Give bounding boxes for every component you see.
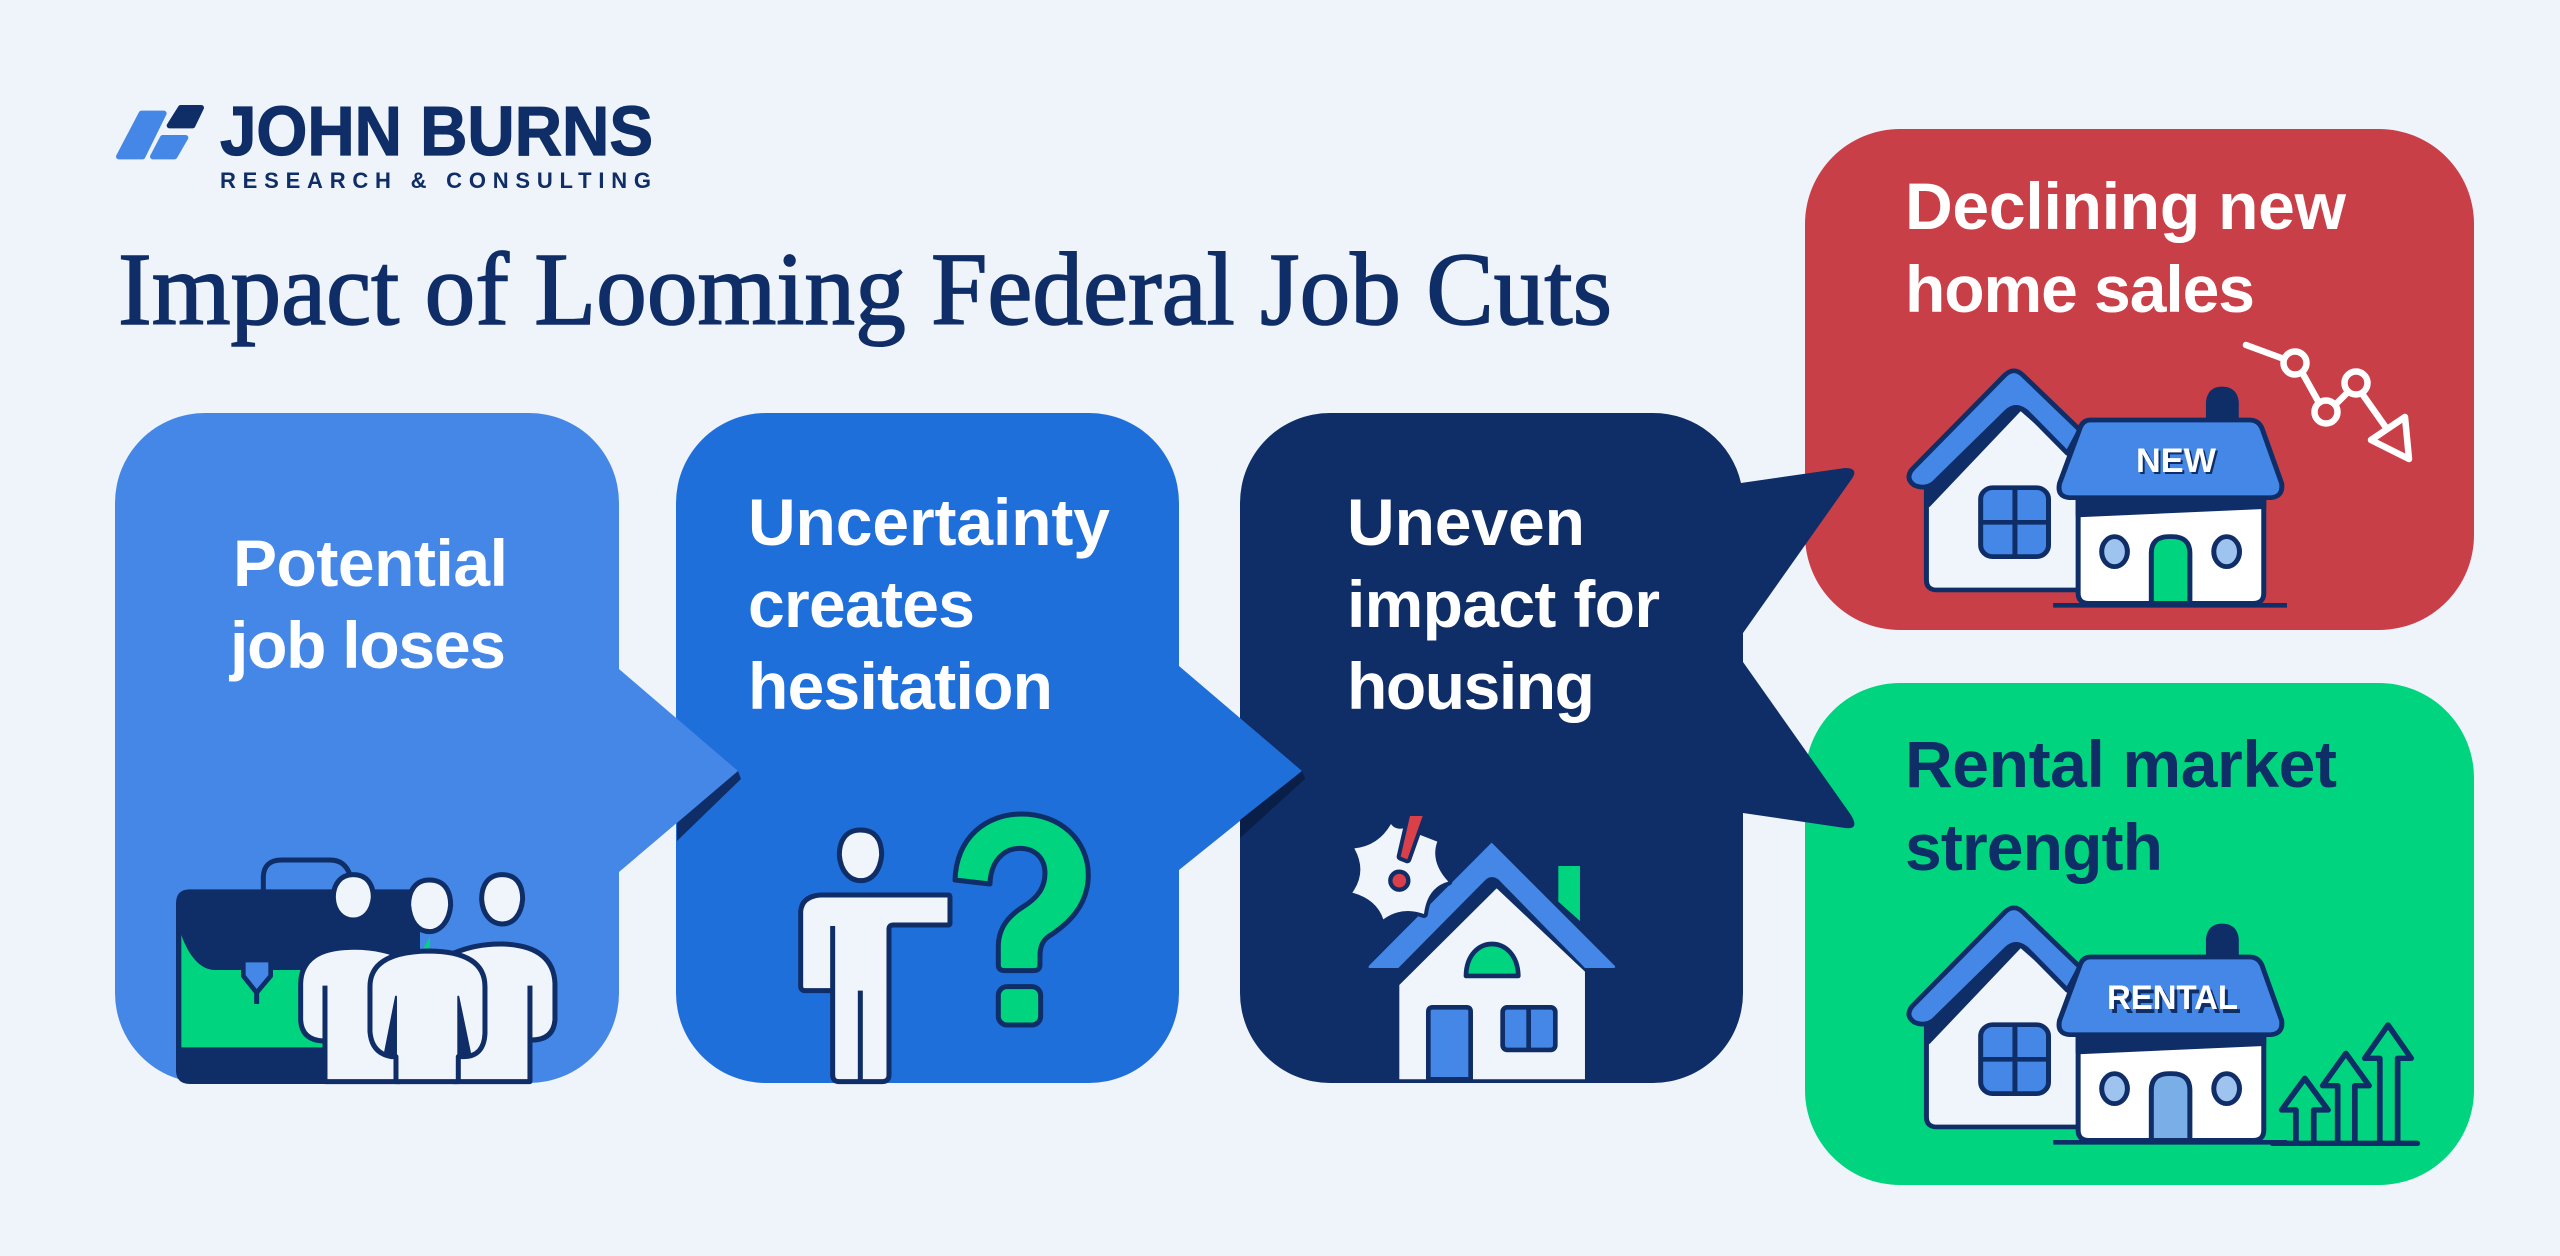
briefcase (176, 860, 430, 1084)
heading: potential job loses: Potential (233, 526, 508, 600)
question mark (955, 814, 1088, 971)
logo wordmark: JOHN BURNS (220, 92, 653, 170)
heading: rental market strength: strength (1905, 810, 2163, 884)
icon: person pointing at question mark (801, 814, 1088, 1082)
panel: uneven impact for housing (1240, 413, 1854, 1083)
icon: down trend chart (2246, 345, 2409, 459)
heading: declining new home sales: home sales (1905, 252, 2255, 326)
heading: uneven impact for housing: impact for (1347, 567, 1660, 641)
person left (301, 875, 400, 1082)
logo icon (119, 108, 201, 157)
heading: potential job loses: job loses (228, 608, 506, 682)
red exclamation mark (1401, 816, 1423, 859)
logo tagline: RESEARCH & CONSULTING (220, 168, 651, 193)
person right (453, 875, 555, 1082)
roof label: RENTAL: RENTAL (2107, 979, 2238, 1017)
arrow shadow (1240, 771, 1305, 838)
heading: uneven impact for housing: Uneven (1347, 485, 1585, 559)
panel: uncertainty creates hesitation (676, 413, 1305, 1083)
icon: houses with NEW roof (1909, 371, 2287, 605)
heading: uncertainty creates hesitation: Uncertainty (748, 485, 1110, 559)
panel: declining new home sales (1805, 129, 2474, 630)
arrow shadow (677, 771, 741, 841)
logo: John Burns Research & Consulting (119, 92, 653, 193)
alert burst (1352, 824, 1448, 919)
icon: houses with RENTAL roof (1909, 908, 2287, 1142)
heading: uncertainty creates hesitation: hesitation (748, 649, 1053, 723)
panel: rental market strength (1805, 683, 2474, 1185)
heading: uneven impact for housing: housing (1347, 649, 1595, 723)
roof label: RENTAL: RENTAL (2110, 983, 2241, 1021)
title: Impact of Looming Federal Job Cuts (118, 232, 1612, 347)
heading: rental market strength: Rental market (1905, 727, 2337, 801)
heading: uncertainty creates hesitation: creates (748, 567, 975, 641)
icon: house with alert burst (1352, 816, 1615, 1079)
icon: rising arrows (2273, 1025, 2417, 1143)
roof label: NEW: NEW (2138, 444, 2219, 482)
person center (370, 880, 485, 1082)
icon: briefcase and three people (176, 860, 555, 1084)
heading: declining new home sales: Declining new (1905, 169, 2347, 243)
panel: potential job loses (115, 413, 741, 1084)
roof label: NEW: NEW (2136, 442, 2217, 480)
